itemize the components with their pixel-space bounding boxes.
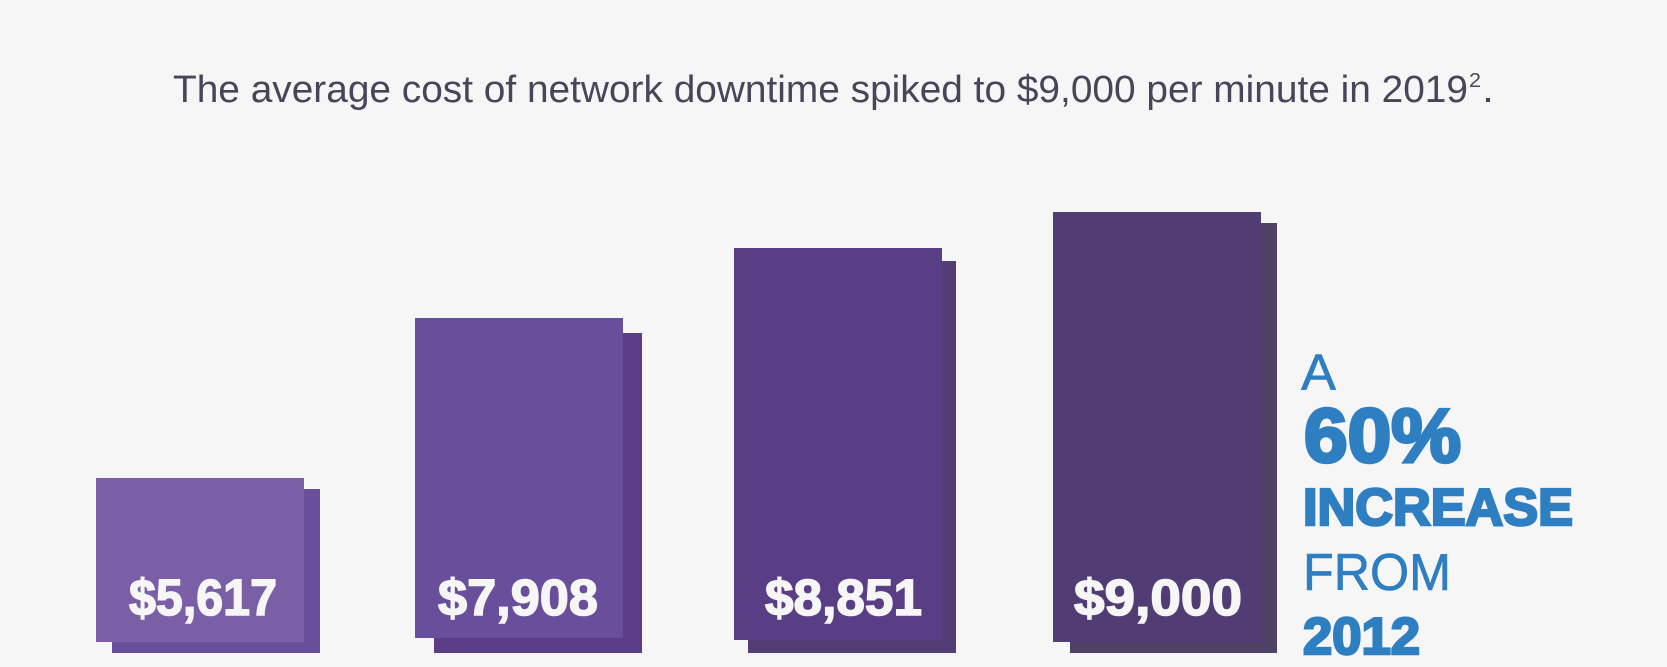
bar: 9000: $9,000	[1074, 569, 1242, 626]
bar: 8851: $8,851	[765, 569, 922, 626]
bar chart	[96, 212, 1277, 653]
bar: 8851	[734, 248, 956, 653]
bar: 7908	[415, 318, 642, 653]
heading: .	[1482, 69, 1494, 111]
bar: 7908: $7,908	[438, 569, 598, 626]
callout: 60% increase from 2012: INCREASE	[1303, 479, 1573, 537]
callout: 60% increase from 2012: 60%	[1304, 394, 1461, 479]
bar: 5617: $5,617	[129, 569, 277, 626]
callout: 60% increase from 2012: A	[1301, 344, 1336, 401]
callout: 60% increase from 2012	[1301, 344, 1573, 666]
heading: The average cost of network downtime spiked to $9,000 per minute in 2019	[173, 69, 1468, 111]
heading: 2	[1469, 70, 1481, 92]
bar: 5617	[96, 478, 320, 653]
bar: 9000	[1053, 212, 1277, 653]
callout: 60% increase from 2012: FROM	[1303, 544, 1451, 602]
callout: 60% increase from 2012: 2012	[1303, 608, 1420, 666]
